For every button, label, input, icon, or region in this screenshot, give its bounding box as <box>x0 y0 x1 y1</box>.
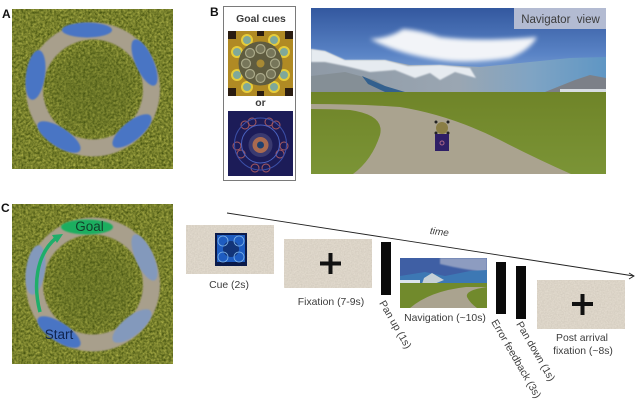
cue image <box>215 233 247 266</box>
bar: error feedback <box>496 262 506 314</box>
label: pan down: Pan down (1s) <box>513 320 556 384</box>
goal zone: Goal <box>75 219 104 234</box>
panel B: navigator view <box>311 8 606 174</box>
bar: pan down <box>516 266 526 319</box>
fixation cross <box>572 294 593 315</box>
start zone <box>33 310 85 354</box>
navigator view label <box>514 8 606 29</box>
panel A: ring environment <box>12 9 173 169</box>
goal cue image 2 <box>228 111 293 176</box>
post arrival fixation screen <box>537 280 625 329</box>
goal cue image 1 <box>228 31 293 96</box>
panel label A: A <box>2 7 11 21</box>
panel B: goal cues box <box>224 6 296 180</box>
blue zones <box>23 22 163 159</box>
label: navigation: Navigation (~10s) <box>404 313 486 324</box>
navigator view label: Navigator view <box>521 14 600 26</box>
time label: time <box>429 226 450 239</box>
panel C: ring with start and goal <box>12 204 173 364</box>
label: post arrival fixation: Post arrival <box>556 333 608 344</box>
label: pan up: Pan up (1s) <box>376 299 413 351</box>
label: error feedback: Error feedback (3s) <box>488 318 542 401</box>
fixation cross <box>320 253 341 274</box>
panel label C: C <box>1 201 10 215</box>
start zone: Start <box>45 327 74 342</box>
goal zone <box>61 219 113 234</box>
heading: goal cues: Goal cues <box>236 14 286 25</box>
muted zones <box>23 231 163 348</box>
cue screen <box>186 225 274 274</box>
goal object in scene <box>434 120 450 151</box>
label: cue: Cue (2s) <box>209 280 249 291</box>
panel label B: B <box>210 5 219 19</box>
text: or: or <box>255 98 266 109</box>
label: fixation: Fixation (7-9s) <box>298 297 364 308</box>
time axis arrow <box>227 213 634 279</box>
bar: pan up <box>381 242 391 295</box>
navigation thumbnail <box>400 258 487 308</box>
fixation screen <box>284 239 372 288</box>
green direction arrow <box>37 234 63 312</box>
label: post arrival fixation: fixation (~8s) <box>553 346 613 357</box>
